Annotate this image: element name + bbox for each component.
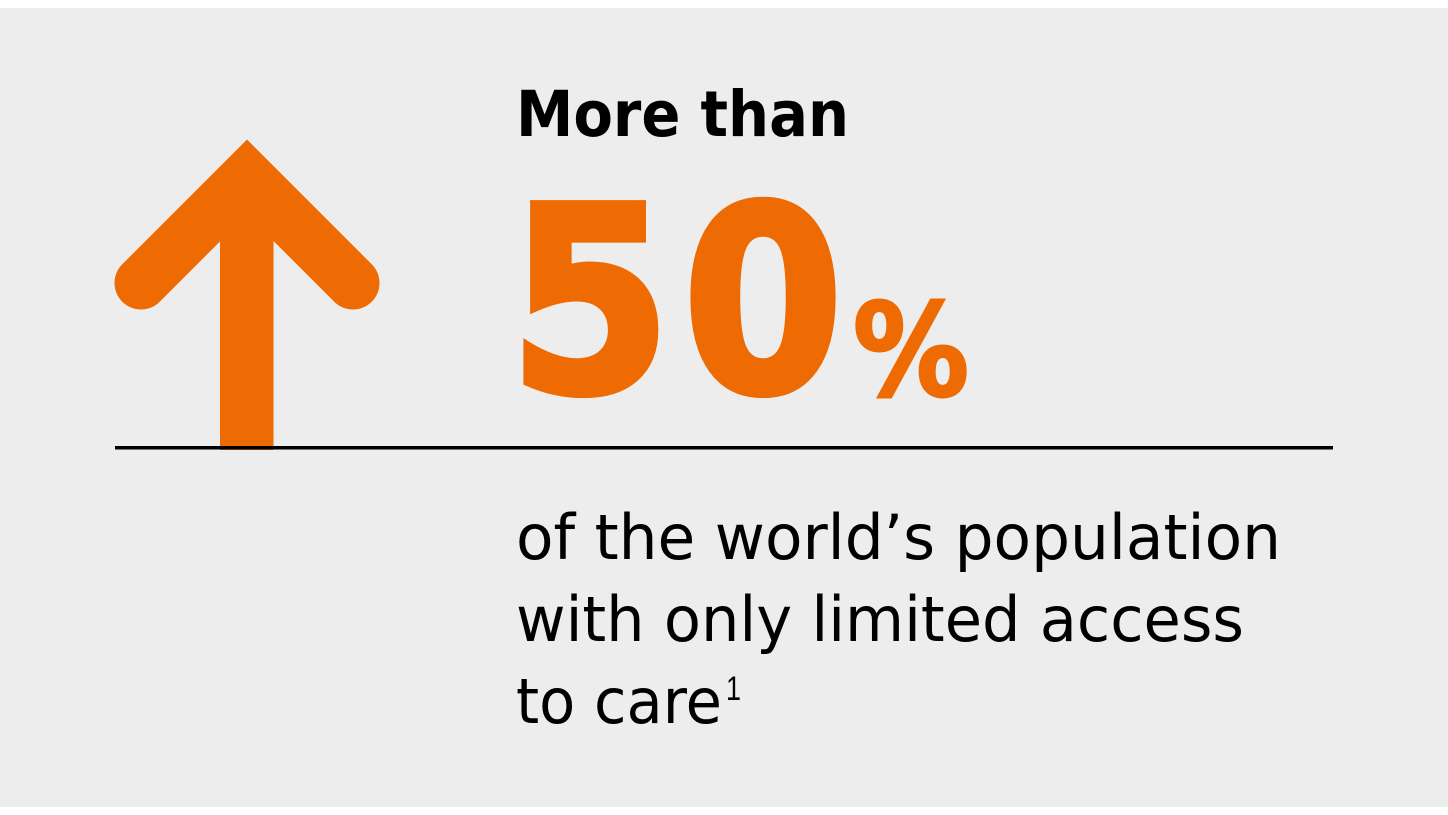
divider line: [115, 446, 1333, 450]
icon: orange up arrow: [141, 170, 353, 450]
digit 0: 0: [682, 152, 844, 452]
line 1: of the world’s population: [516, 501, 1281, 574]
digit 5: 5: [508, 152, 672, 452]
heading: More than: More than: [516, 78, 849, 151]
line 3: to care: [516, 665, 722, 738]
big number: 50%: [508, 152, 969, 452]
footnote marker: 1: [726, 670, 741, 708]
percent sign: %: [853, 277, 969, 426]
body text: [516, 501, 1281, 738]
line 2: with only limited access: [516, 583, 1244, 656]
